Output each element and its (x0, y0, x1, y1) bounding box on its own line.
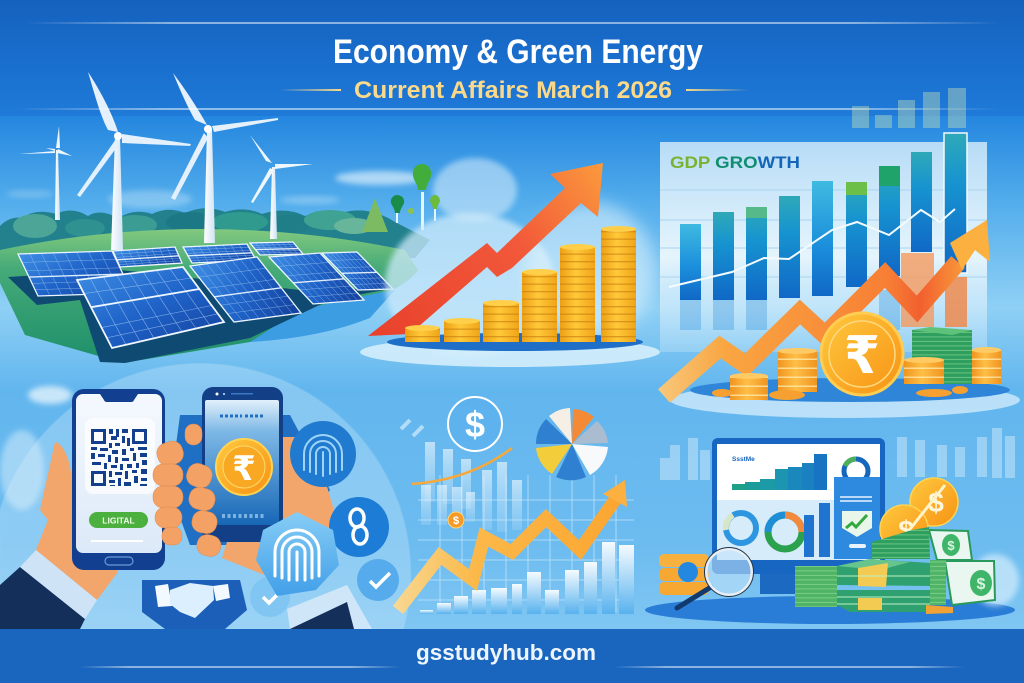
scene: rupee coins and cash (664, 220, 1020, 418)
scene: analytics charts (398, 397, 634, 614)
footer rule right (614, 666, 964, 668)
icon: check circle left (250, 577, 290, 617)
solar panel back left (18, 251, 132, 296)
coin stack 4 (522, 269, 557, 342)
header band (0, 0, 1024, 116)
monitor label: SsstMe (732, 456, 755, 463)
icon: small dollar coin (448, 512, 464, 528)
bars (680, 133, 967, 300)
icon: dollar circle (448, 397, 502, 451)
monitor (712, 438, 885, 594)
grid lines (660, 190, 987, 277)
phone right (202, 387, 283, 542)
icon: rupee coin: ₹ (844, 327, 880, 385)
solar panel centre (190, 257, 301, 322)
title: Economy & Green Energy (333, 33, 703, 71)
wind turbine 4 (250, 135, 313, 239)
QR code (91, 429, 147, 486)
shadow under panels (8, 270, 395, 363)
area bars (732, 454, 827, 490)
subtitle rule right (686, 89, 748, 91)
bars (420, 542, 634, 614)
coin stack 3 (483, 300, 519, 342)
subtitle: Current Affairs March 2026 (354, 77, 672, 104)
icon: handshake (155, 583, 230, 618)
coin stack 6 (601, 226, 636, 342)
coin stack 5 (560, 244, 595, 342)
flat coins (712, 386, 968, 400)
coin stack: orange (659, 554, 709, 595)
coin stack (730, 373, 768, 400)
arrow: red growth arrow (368, 163, 603, 336)
icon: small dollar coin: $ (453, 515, 459, 527)
icon: check circle right (357, 559, 399, 601)
solar panel front (77, 267, 224, 348)
solar panel back centre (183, 244, 256, 263)
footer band (0, 629, 1024, 683)
dome (0, 364, 410, 629)
translucent orange bars (901, 253, 967, 327)
water beneath panels (250, 290, 395, 342)
donut top (844, 459, 868, 483)
side panel (834, 477, 880, 559)
solar panel far right (322, 252, 393, 290)
icon: rupee coin (216, 439, 272, 495)
scene: dashboard and money (645, 428, 1019, 624)
wind turbine 1 (19, 126, 72, 220)
icon: dollar coins: $ (898, 515, 914, 546)
donut right (768, 515, 802, 549)
left sleeve (0, 550, 97, 629)
coin stack 2 (444, 318, 480, 342)
clouds (971, 554, 1019, 606)
scene: rising coin stacks (360, 163, 660, 367)
panel background (660, 142, 987, 352)
clouds (0, 386, 72, 510)
icon: dollar coins (880, 478, 958, 553)
cash stack: upper (872, 527, 930, 559)
cloud bubble (360, 202, 660, 367)
icon: rupee coin (821, 313, 903, 395)
scene: wind farm and solar panels (0, 72, 440, 363)
icon: rupee coin: ₹ (232, 450, 256, 488)
faint background bars (421, 442, 522, 532)
wind turbine 2 (77, 72, 191, 250)
solar panel back right (250, 242, 303, 255)
icon: dollar circle: $ (465, 404, 485, 445)
bar reflections (680, 290, 900, 330)
scene: digital payments (0, 364, 410, 629)
small wedge (926, 605, 953, 614)
coin stack (778, 348, 817, 392)
subtitle rule left (280, 89, 341, 91)
mini bars (804, 503, 830, 557)
cash stack: left (795, 566, 837, 607)
icon: magnifier (677, 548, 754, 608)
tree line (0, 198, 430, 258)
small marks (401, 420, 423, 436)
platform (670, 378, 1020, 418)
right hand (222, 437, 337, 585)
website: gsstudyhub.com (416, 640, 596, 665)
clouds: sky (6, 158, 517, 222)
cash bundle (912, 327, 972, 384)
icon: fingerprint hexagon (256, 512, 339, 596)
button: LIGITAL: LIGITAL (102, 516, 135, 526)
solar panel right (269, 253, 364, 304)
white trend line (669, 209, 955, 287)
ground hill (0, 229, 418, 363)
arrow: thin orange curve (412, 448, 512, 484)
left hand (36, 442, 118, 600)
footer rule left (80, 666, 400, 668)
solar panel back second (113, 247, 182, 267)
banknotes (929, 530, 995, 605)
faded bars above panel (852, 88, 966, 128)
right sleeve (287, 585, 372, 629)
panel: GDP growth chart (660, 88, 987, 352)
icon: dollar coins: $ (928, 487, 944, 518)
icon: fingerprint circle (290, 421, 356, 487)
title: GDP GROWTH: GDP GROWTH (670, 153, 800, 172)
hexagons behind phones (142, 415, 330, 629)
donut left (726, 513, 756, 543)
heading block (15, 22, 1000, 110)
header rule top (25, 22, 1000, 24)
arrow: orange zigzag (664, 220, 990, 396)
fingers (153, 424, 223, 559)
cash stack: front (837, 559, 930, 612)
phone left (72, 389, 165, 570)
coin stack (904, 357, 944, 384)
banknotes: $ (947, 538, 955, 553)
pie chart (536, 408, 608, 480)
banknotes: $ (977, 576, 986, 593)
faint skyline bars (660, 428, 1015, 480)
coin stack (972, 347, 1001, 384)
icon: link circle (329, 497, 389, 557)
coin stack 1 (405, 325, 440, 342)
icon: green light bulbs (391, 164, 440, 230)
button: LIGITAL (89, 512, 148, 528)
platform (645, 596, 1015, 624)
grid (418, 475, 634, 612)
arrow: yellow zigzag (398, 480, 627, 610)
cash stack: right (930, 560, 946, 605)
wind turbine 3 (171, 73, 278, 243)
header rule bottom (15, 108, 1000, 110)
